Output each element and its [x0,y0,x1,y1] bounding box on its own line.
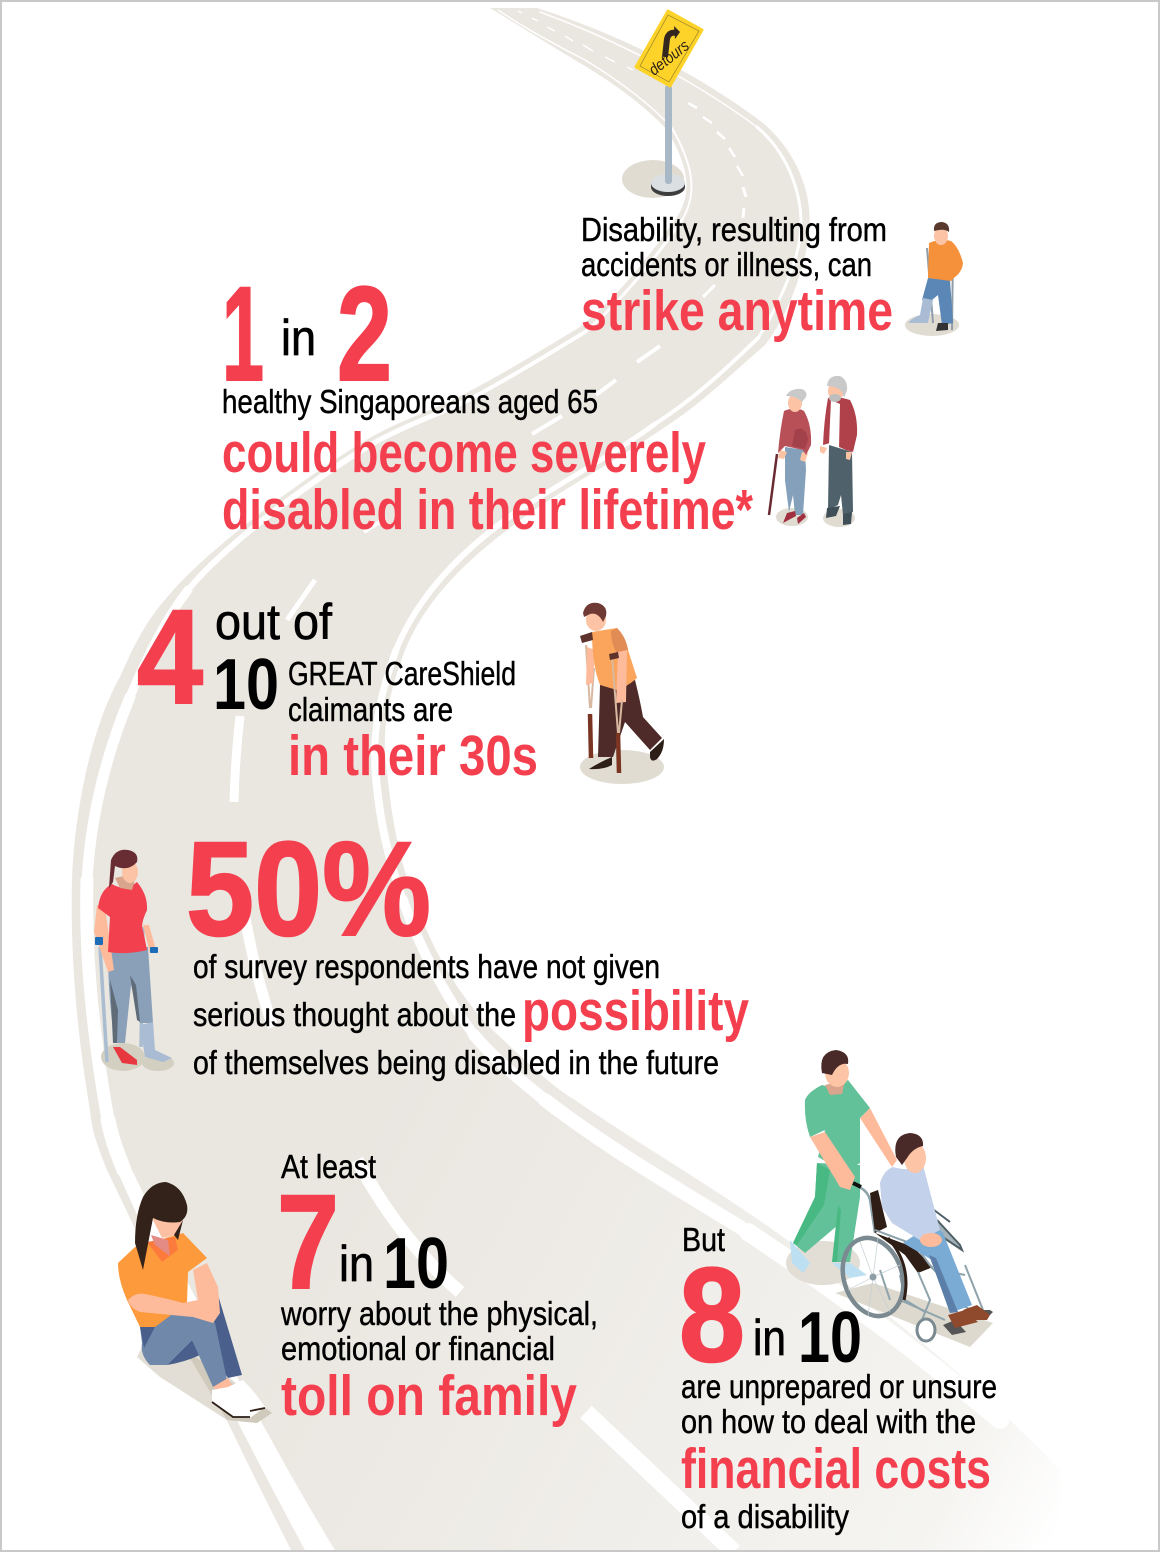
panel: 4 out of 10 [137,583,664,788]
stat: 1 in 2: 1 [222,260,264,409]
icon: man on crutches [580,603,664,784]
stat: 4 out of 10: 10 [213,645,279,725]
icon: elderly couple [769,376,857,527]
icon: woman sitting with head bowed [118,1182,272,1423]
highlight: severely disabled: disabled in their lifetime* [222,478,754,542]
icon: man with leg cast and crutches [905,222,963,336]
text: disability intro: accidents or illness, can [581,246,872,283]
text: survey respondents [193,948,719,1081]
text: worry about family: worry about the physical, [280,1295,598,1332]
stat: 7 in 10 [277,1168,449,1317]
highlight: toll on family: toll on family [281,1364,577,1428]
highlight: severely disabled [222,421,754,542]
highlight: strike anytime: strike anytime [581,279,893,343]
highlight: severely disabled: could become severely [222,421,706,485]
panel: 1 in 2 [222,260,857,542]
icon: carer pushing patient in wheelchair [786,1050,993,1347]
text: unprepared or unsure: are unprepared or unsure [681,1368,997,1405]
text: of a disability: of a disability [681,1498,849,1535]
text: but: But [682,1221,725,1258]
highlight: in their 30s: in their 30s [288,724,538,788]
panel: 50 percent [94,815,749,1081]
stat: 8 in 10: 8 [679,1241,745,1390]
icon: detour road sign: detours [646,37,693,79]
text: survey respondents: of themselves being disabled in the future [193,1044,719,1081]
text: disability intro [581,211,887,283]
text: survey respondents: of survey respondents have not given [193,948,660,985]
icon: detour road sign [622,11,702,198]
text: disability intro: Disability, resulting from [581,211,887,248]
text: GREAT CareShield claimants: GREAT CareShield [288,655,516,692]
highlight: financial costs: financial costs [681,1437,991,1501]
stat: 1 in 2: 2 [337,260,392,409]
stat: 1 in 2 [222,260,392,409]
stat: 1 in 2: in [281,310,316,366]
highlight: possibility: possibility [522,979,749,1043]
stat: 8 in 10: in [753,1310,786,1366]
text: GREAT CareShield claimants [288,655,516,728]
stat: 8 in 10 [679,1241,862,1390]
panel: strike anytime [581,211,963,343]
text: survey respondents: serious thought about the [193,996,516,1033]
text: worry about family [280,1295,598,1367]
icon: woman with crutches and cast [94,850,174,1071]
stat: 7 in 10: 7 [277,1168,339,1317]
text: GREAT CareShield claimants: claimants are [288,691,453,728]
text: at least: At least [281,1148,376,1185]
panel: 7 in 10 [118,1148,598,1428]
stat: 7 in 10: in [339,1236,374,1292]
stat: 4 out of 10: out of [215,594,332,650]
text: unprepared or unsure: on how to deal with the [681,1403,976,1440]
stat: 50%: 50% [186,815,431,964]
stat: 4 out of 10: 4 [137,583,203,732]
text: worry about family: emotional or financial [281,1330,555,1367]
panel: 8 in 10 [679,1050,997,1535]
stat: 8 in 10: 10 [798,1298,862,1378]
text: healthy Singaporeans: healthy Singaporeans aged 65 [222,383,598,420]
text: unprepared or unsure [681,1368,997,1440]
stat: 7 in 10: 10 [383,1224,449,1304]
stat: 4 out of 10 [137,583,332,732]
